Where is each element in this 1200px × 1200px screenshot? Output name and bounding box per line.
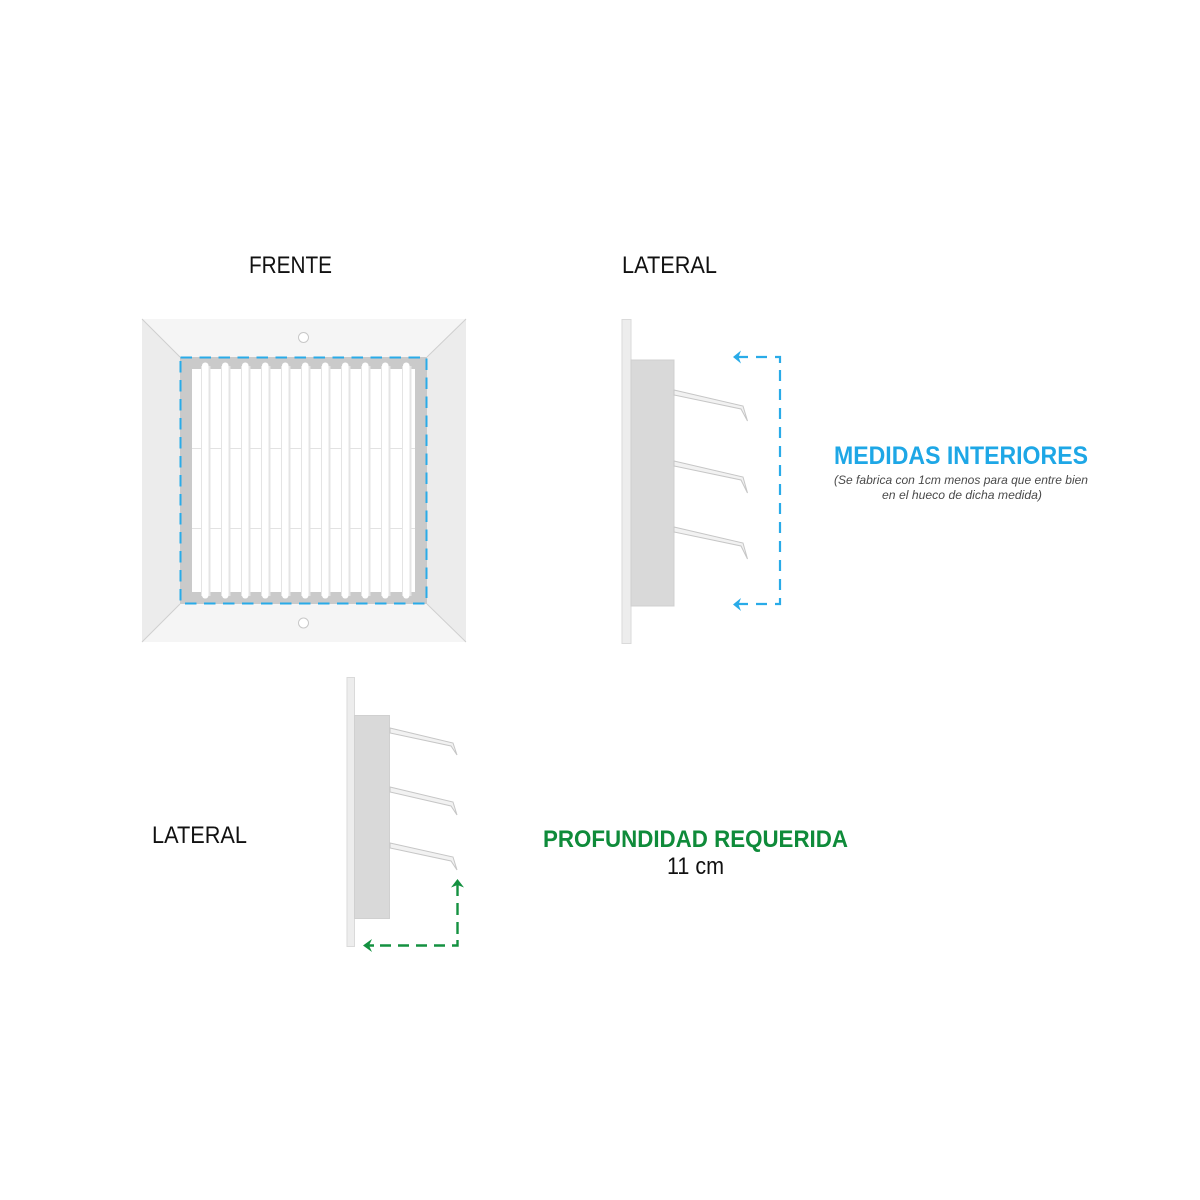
- screw holes: [298, 332, 308, 628]
- heading: lateral bottom: LATERAL: [152, 822, 247, 849]
- note: medidas interiores: en el hueco de dicha medida): [882, 488, 1042, 502]
- heading: profundidad requerida: PROFUNDIDAD REQUERIDA: [543, 826, 848, 853]
- note: medidas interiores: [834, 473, 1088, 502]
- louver 2: [390, 787, 457, 815]
- louver 2: [674, 461, 748, 493]
- louver 1: [674, 390, 748, 421]
- green dimension arrow: [363, 879, 464, 952]
- blue dimension arrow: [733, 350, 780, 611]
- louver 3: [390, 843, 457, 870]
- note: medidas interiores: (Se fabrica con 1cm menos para que entre bien: [834, 473, 1088, 487]
- side view bottom: [347, 678, 457, 946]
- heading: medidas interiores: MEDIDAS INTERIORES: [834, 442, 1088, 470]
- side view top: [622, 320, 748, 644]
- louver 3: [674, 527, 748, 559]
- heading: frente: FRENTE: [249, 252, 332, 279]
- louver 1: [390, 728, 457, 755]
- slats: [201, 362, 412, 598]
- front view of grille: [142, 319, 466, 642]
- heading: lateral top: LATERAL: [622, 252, 717, 279]
- value: 11 cm: 11 cm: [667, 853, 724, 880]
- dashed blue outline: [180, 358, 426, 604]
